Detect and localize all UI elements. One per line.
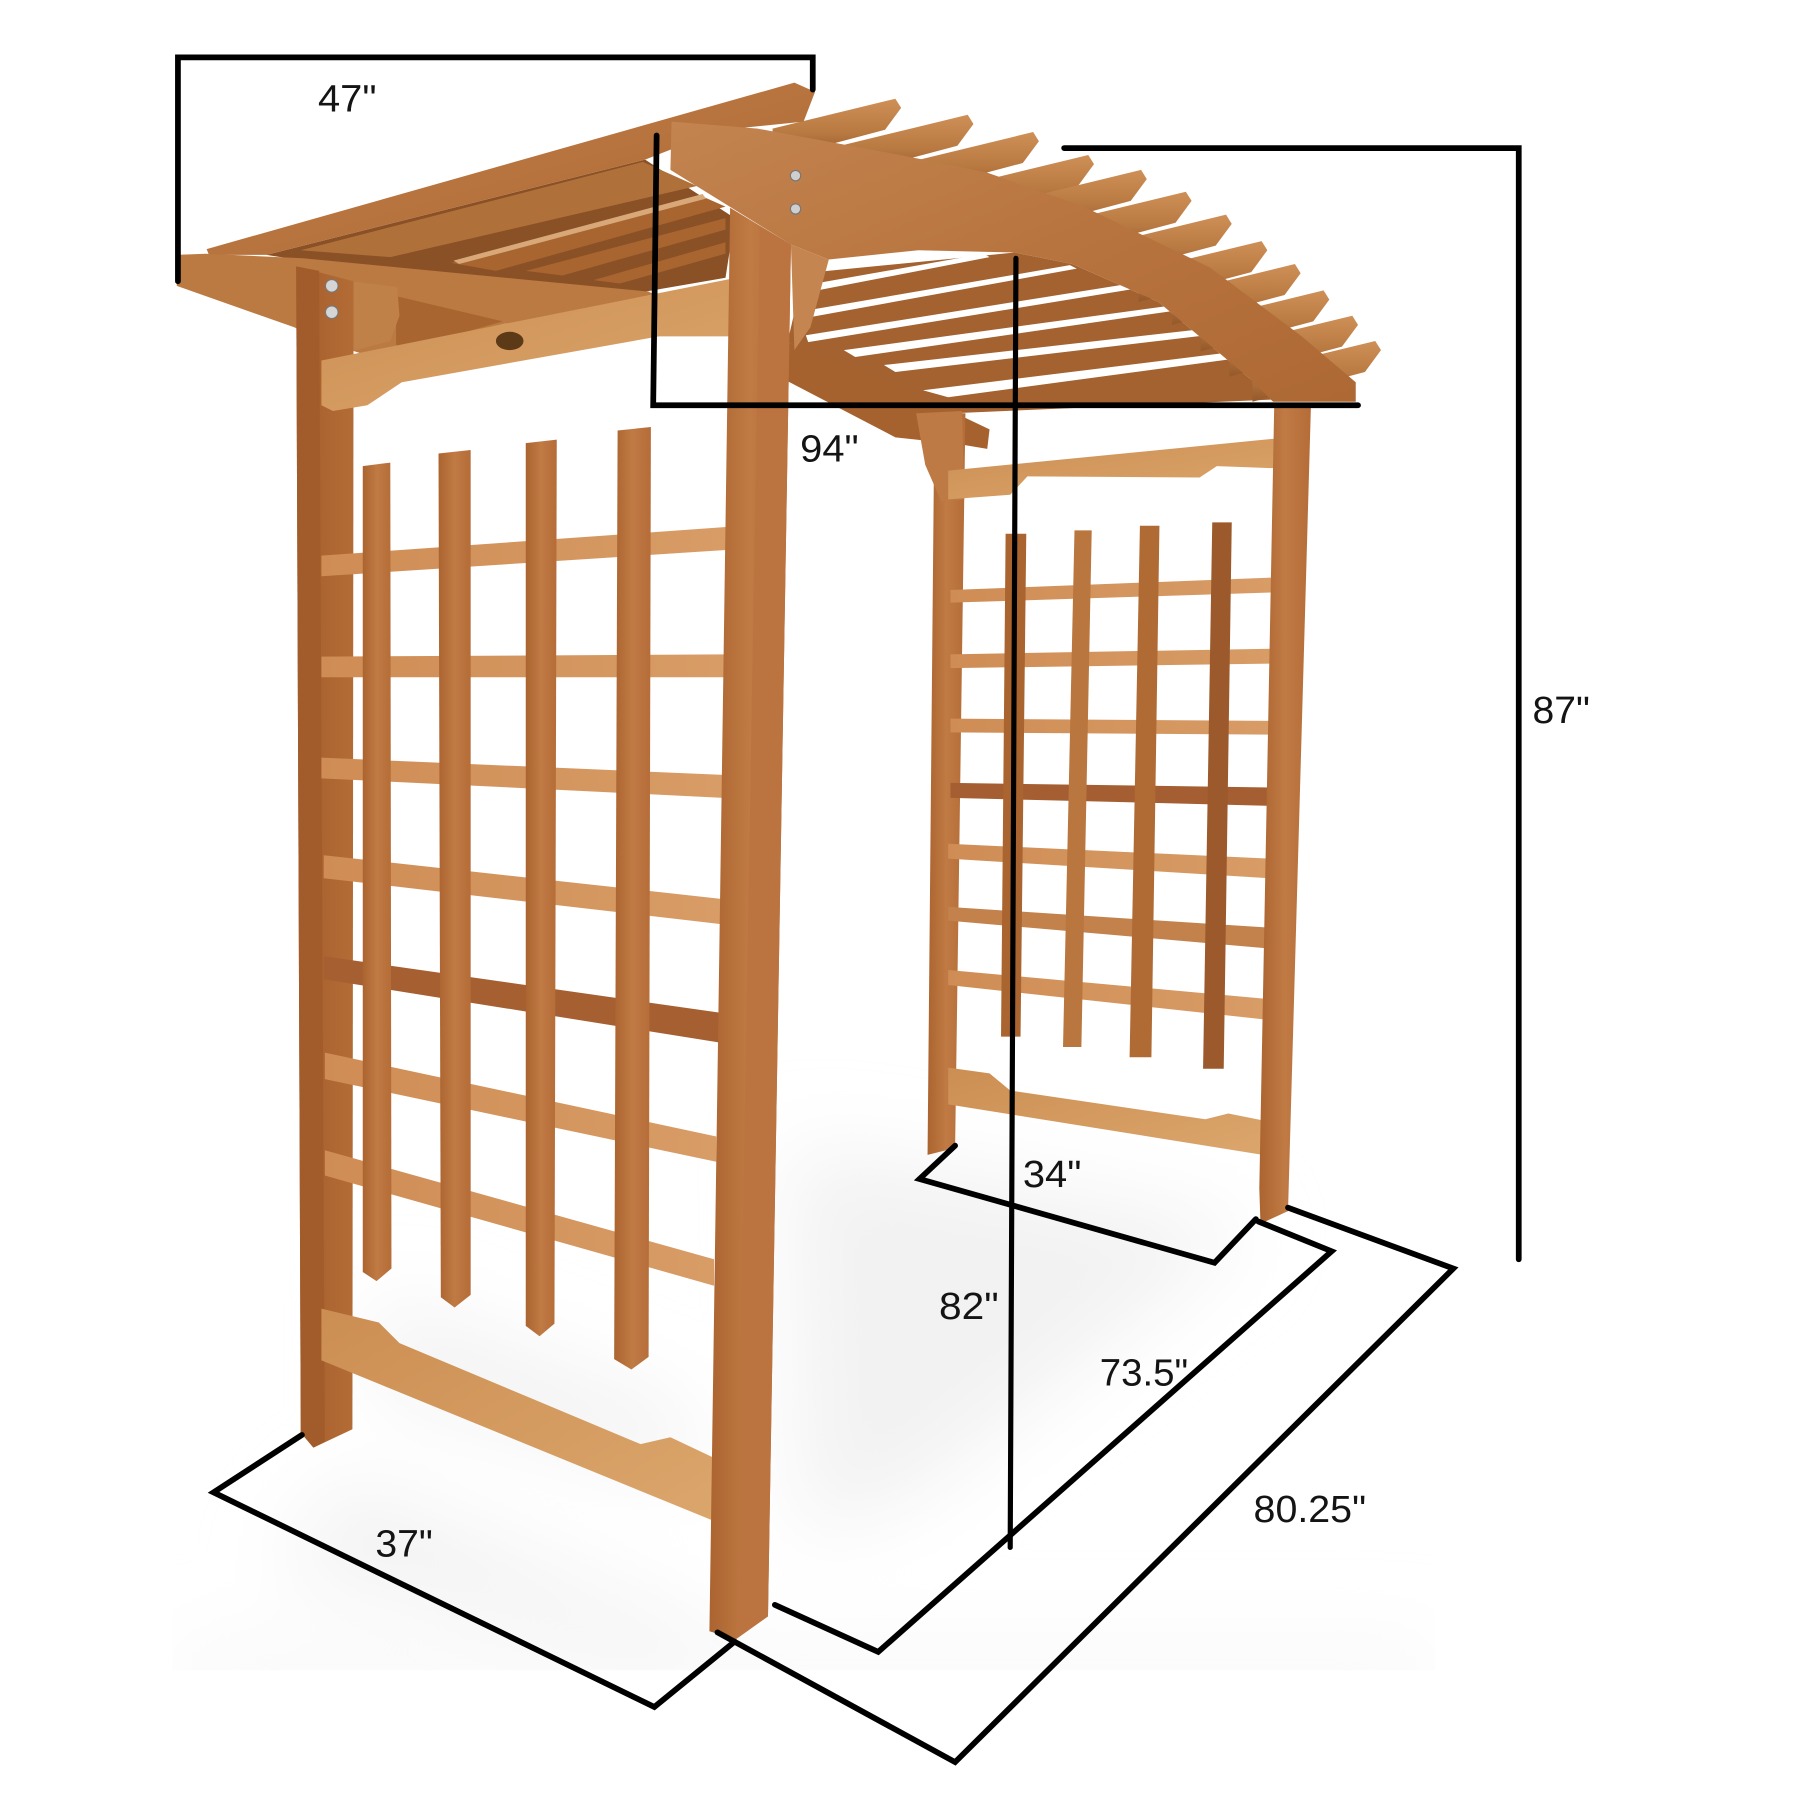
dimension: 34 in: 34" bbox=[1023, 1154, 1081, 1196]
left bottom rail bbox=[321, 1309, 714, 1521]
left brace bbox=[351, 281, 399, 351]
lintel badge bbox=[496, 332, 523, 350]
dimension: 82 in bbox=[939, 258, 1016, 1547]
dimension: 73.5 in bbox=[775, 1221, 1332, 1652]
rafter ends right bbox=[773, 99, 1381, 402]
white gaps between slats bbox=[806, 254, 1239, 397]
dimension: 34 in bbox=[920, 1146, 1256, 1263]
front right post bbox=[709, 208, 829, 1639]
dimension: 94 in bbox=[653, 135, 1358, 470]
left post bbox=[296, 266, 354, 1448]
front lintel bbox=[321, 279, 730, 411]
rear top rail bbox=[948, 439, 1279, 499]
left arch beam bbox=[177, 254, 668, 363]
left post bolts bbox=[325, 280, 338, 319]
top rafter bbox=[207, 83, 815, 255]
left beam lower shade bbox=[396, 296, 503, 350]
dimension: 82 in: 82" bbox=[939, 1286, 999, 1328]
dimension: 47 in bbox=[178, 57, 813, 281]
dimension: 73.5 in: 73.5" bbox=[1100, 1353, 1188, 1395]
dimension: 47 in: 47" bbox=[318, 78, 377, 120]
front post brace bbox=[791, 245, 829, 350]
rear trellis pickets bbox=[1001, 522, 1232, 1069]
dimension: 80.25 in bbox=[717, 1208, 1453, 1762]
rear right post bbox=[1259, 404, 1311, 1224]
roof underside slats bbox=[788, 253, 1273, 413]
slat C bbox=[526, 218, 726, 276]
dimension: 37 in: 37" bbox=[375, 1524, 433, 1566]
back arch beam bbox=[788, 342, 990, 449]
left trellis panel bbox=[321, 427, 728, 1521]
slat A bbox=[301, 162, 697, 257]
dimension: 80.25 in: 80.25" bbox=[1254, 1489, 1366, 1531]
slat B bbox=[451, 197, 726, 271]
rear left post bbox=[928, 413, 965, 1155]
slat D bbox=[593, 242, 726, 284]
rear bottom rail bbox=[948, 1068, 1263, 1155]
rear trellis panel bbox=[948, 439, 1279, 1155]
slat B highlight bbox=[453, 194, 706, 264]
ground shadow bbox=[339, 1172, 1172, 1598]
right arch beam bbox=[670, 122, 1356, 402]
left trellis horizontal slats bbox=[321, 527, 728, 1286]
arch bolts bbox=[790, 170, 801, 214]
dimension: 87 in: 87" bbox=[1533, 690, 1590, 732]
dimension: 94 in: 94" bbox=[800, 428, 859, 470]
dimension: 87 in bbox=[1064, 148, 1590, 1259]
left roof slats bbox=[266, 160, 735, 292]
rear left brace bbox=[916, 411, 964, 502]
left trellis pickets bbox=[363, 427, 651, 1370]
rear trellis horizontal slats bbox=[948, 577, 1277, 1019]
dimension: 37 in bbox=[214, 1435, 735, 1707]
